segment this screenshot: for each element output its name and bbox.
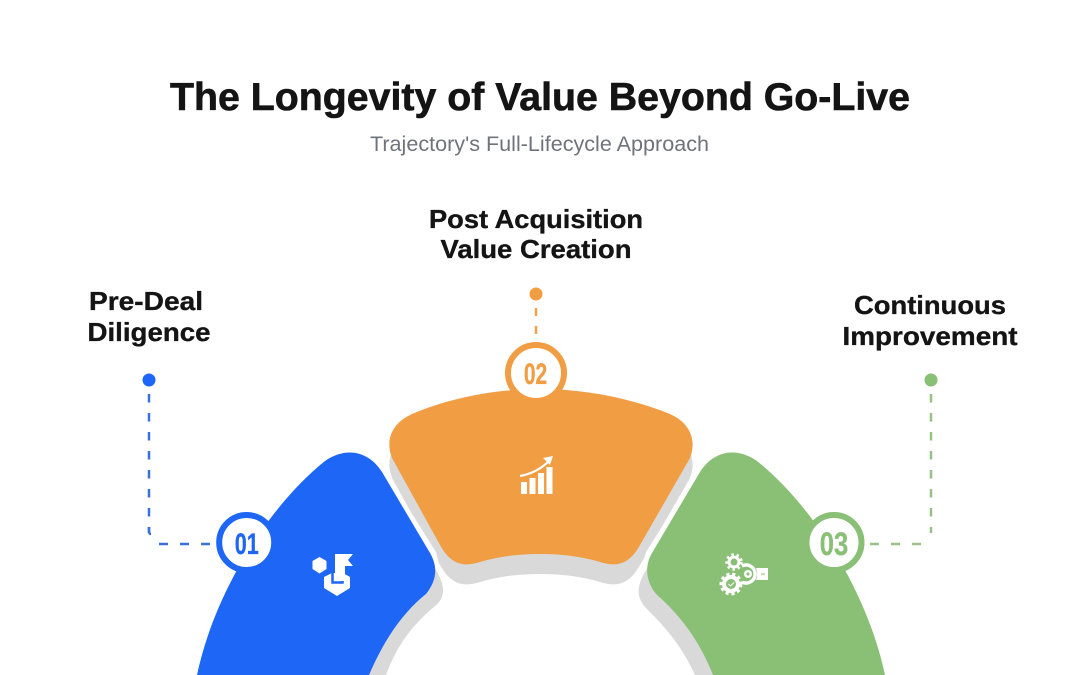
label: Continuous Improvement xyxy=(842,290,1018,351)
title: The Longevity of Value Beyond Go-Live xyxy=(170,76,910,119)
connector: blue xyxy=(149,394,216,544)
segment: orange xyxy=(389,389,693,564)
badge 02: 02 xyxy=(524,359,547,391)
shadow: blue segment xyxy=(290,471,443,675)
label: Pre-Deal Diligence: Diligence xyxy=(88,317,210,347)
icon: growth chart xyxy=(520,456,553,494)
label: Continuous Improvement: Improvement xyxy=(842,321,1018,351)
white gap: green segment xyxy=(640,466,782,600)
badge 02 xyxy=(508,345,564,401)
shadow: orange segment xyxy=(389,409,693,584)
marker dot: orange xyxy=(530,288,542,300)
marker dot: green xyxy=(924,374,938,386)
marker dot: blue xyxy=(142,374,156,386)
connector: green xyxy=(870,394,931,544)
connector: orange xyxy=(535,308,537,336)
shadow: green segment xyxy=(639,471,790,675)
segment: green xyxy=(647,452,885,675)
label: Post Acquisition Value Creation: Post Acquisition xyxy=(429,204,643,234)
label: Post Acquisition Value Creation xyxy=(429,204,643,264)
white gap: blue segment xyxy=(300,466,442,600)
label: Pre-Deal Diligence xyxy=(88,286,210,347)
segment: blue xyxy=(197,452,435,675)
badge 03 xyxy=(806,515,862,570)
badge 03: 03 xyxy=(820,527,848,563)
label: Continuous Improvement: Continuous xyxy=(854,290,1006,320)
icon: hexagons and flag xyxy=(312,554,353,596)
label: Post Acquisition Value Creation: Value Creation xyxy=(440,234,632,264)
label: Pre-Deal Diligence: Pre-Deal xyxy=(89,286,203,316)
subtitle: Trajectory's Full-Lifecycle Approach xyxy=(370,133,709,156)
icon: gears and wrench xyxy=(721,554,768,594)
badge 01: 01 xyxy=(235,526,259,561)
badge 01 xyxy=(219,515,274,570)
